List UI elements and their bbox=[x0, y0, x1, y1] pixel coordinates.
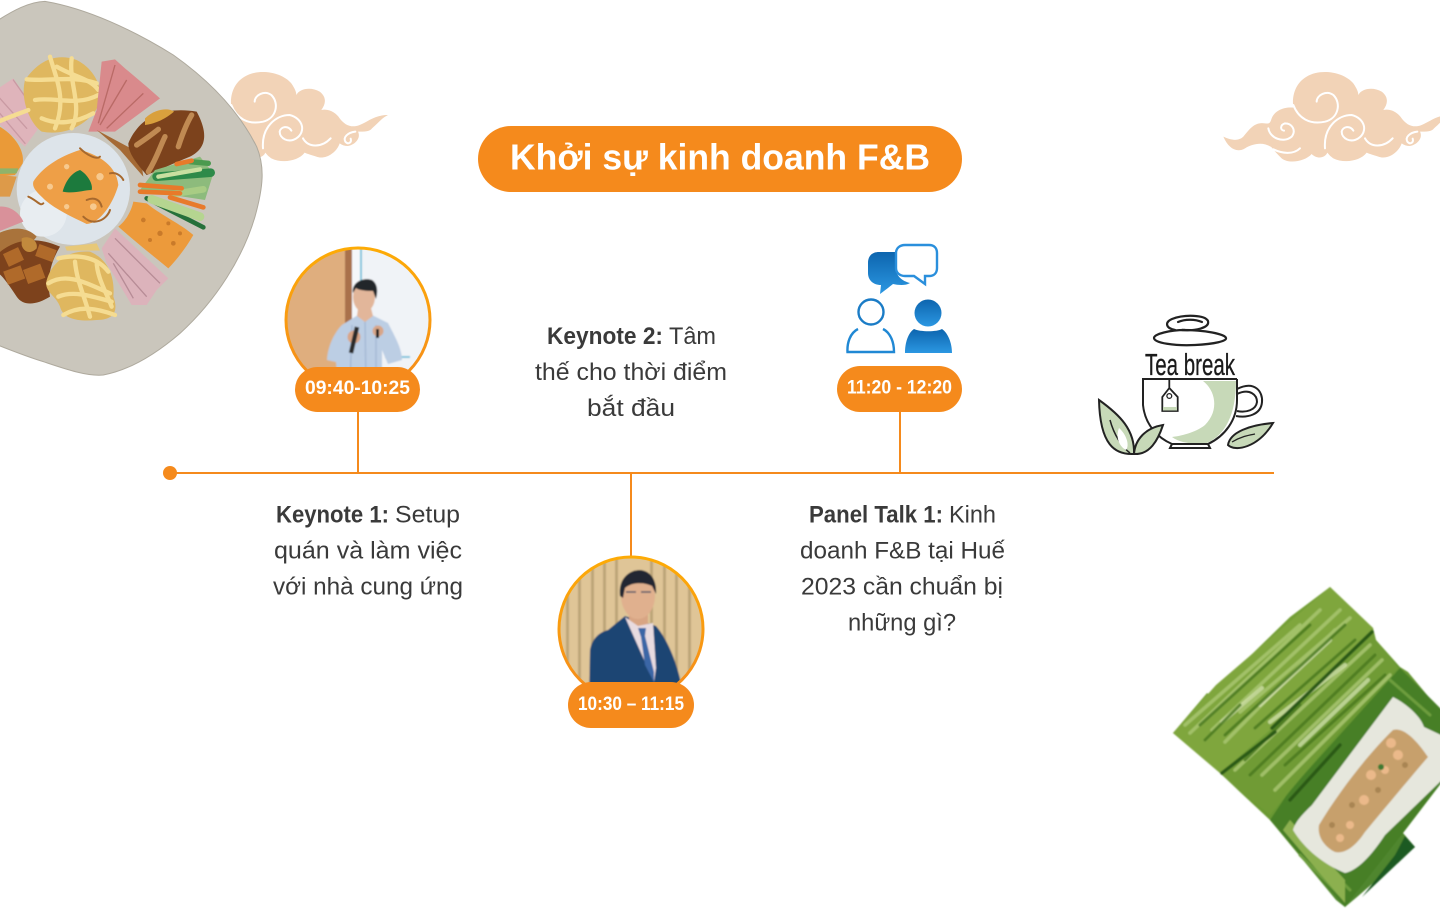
cup handle bbox=[1236, 386, 1262, 417]
text: keynote 2 bbox=[535, 323, 727, 422]
steam bbox=[1154, 316, 1226, 345]
text: keynote 2: Tâm bbox=[669, 323, 716, 350]
photo ring bbox=[559, 557, 703, 701]
pork top right bbox=[128, 110, 204, 175]
hands and microphone bbox=[348, 330, 360, 344]
time pill: 09:40-10:25 bbox=[295, 367, 420, 412]
food photo: rice plate bbox=[0, 1, 262, 375]
photo ring bbox=[286, 248, 430, 392]
text: panel talk 1 bbox=[800, 502, 1006, 636]
text: keynote 1: quán và làm việc bbox=[274, 538, 462, 564]
time pill: 11:20 - 12:20 bbox=[837, 366, 962, 412]
leaf fibres bbox=[1185, 610, 1430, 895]
egg strands bottom bbox=[48, 256, 115, 317]
connector: panel talk bbox=[899, 410, 901, 473]
text: panel talk 1: những gì? bbox=[848, 610, 956, 636]
darker lower fold bbox=[1270, 668, 1440, 907]
time pill: 10:30 – 11:15: 10:30 – 11:15 bbox=[578, 694, 684, 715]
rice mound bbox=[17, 133, 130, 245]
speaker photo: keynote 2 bbox=[559, 557, 703, 701]
connector: keynote 2 bbox=[630, 473, 632, 556]
suit bbox=[588, 615, 681, 683]
text: keynote 1: Keynote 1: bbox=[276, 502, 389, 528]
fried shallots bbox=[97, 130, 143, 177]
text: keynote 2: Keynote 2: bbox=[547, 323, 663, 350]
cup green shade bbox=[1172, 381, 1236, 444]
text: panel talk 1: doanh F&B tại Huế bbox=[800, 538, 1006, 564]
orange crumbs left bbox=[0, 125, 23, 177]
ham bottom bbox=[102, 228, 168, 305]
pork bottom left bbox=[0, 240, 60, 304]
tea bag tag bbox=[1162, 379, 1178, 411]
shirt bbox=[326, 315, 402, 367]
icon: tea break cup bbox=[1099, 316, 1273, 454]
text: keynote 2: bắt đầu bbox=[587, 395, 675, 422]
leaves bbox=[1099, 400, 1134, 454]
wood door bbox=[288, 250, 346, 370]
speaker photo: keynote 1 bbox=[284, 246, 432, 372]
upper leaf fold bbox=[1173, 587, 1373, 773]
title pill: Khởi sự kinh doanh F&B bbox=[510, 136, 930, 178]
timeline start dot bbox=[163, 466, 177, 480]
head bbox=[352, 287, 376, 310]
egg strands top bbox=[0, 57, 98, 128]
text: keynote 1 bbox=[273, 502, 463, 600]
time pill: 09:40-10:25: 09:40-10:25 bbox=[305, 378, 410, 399]
filled person bbox=[914, 300, 942, 326]
text: panel talk 1: Kinh bbox=[949, 502, 996, 528]
outline person bbox=[858, 300, 884, 324]
cup outline bbox=[1142, 379, 1237, 448]
outline speech bubble bbox=[896, 245, 937, 284]
orange crumbs right bbox=[118, 202, 193, 268]
timeline axis bbox=[163, 466, 1274, 480]
text: keynote 1: Setup bbox=[395, 502, 460, 528]
tea break label: Tea break bbox=[1145, 347, 1235, 382]
connector: keynote 1 bbox=[357, 410, 359, 473]
shrimp filling bbox=[1319, 729, 1428, 852]
text: panel talk 1: Panel Talk 1: bbox=[809, 502, 943, 528]
ham top right bbox=[88, 59, 160, 132]
leaf wrap bbox=[1173, 587, 1440, 907]
egg base bottom bbox=[46, 252, 115, 321]
cucumber bbox=[140, 157, 213, 200]
neck bbox=[629, 612, 648, 626]
middle leaf fold bbox=[1222, 635, 1398, 815]
text: panel talk 1: 2023 cần chuẩn bị bbox=[801, 574, 1003, 600]
cloud: top right bbox=[1223, 72, 1440, 161]
food photo: banana leaf rice cake bbox=[1173, 587, 1440, 907]
time pill: 11:20 - 12:20: 11:20 - 12:20 bbox=[847, 378, 952, 398]
sticky rice bbox=[1293, 697, 1440, 873]
dark leaf at bottom bbox=[1362, 836, 1415, 897]
plate bbox=[0, 1, 262, 375]
text: keynote 2: thế cho thời điểm bbox=[535, 359, 727, 386]
left items bbox=[0, 206, 23, 232]
filled speech bubble bbox=[868, 252, 910, 294]
cloud: top left bbox=[161, 72, 388, 161]
shirt and tie bbox=[625, 617, 656, 682]
egg base top bbox=[24, 57, 100, 133]
wood slats bbox=[566, 560, 692, 679]
green herb bbox=[63, 170, 92, 192]
carrot topping bbox=[33, 150, 118, 224]
time pill: 10:30 – 11:15 bbox=[568, 682, 694, 728]
title pill bbox=[478, 126, 962, 192]
ham left bbox=[0, 78, 43, 147]
text: keynote 1: với nhà cung ứng bbox=[273, 574, 463, 600]
head bbox=[621, 582, 655, 618]
icon: panel discussion bbox=[847, 245, 952, 353]
